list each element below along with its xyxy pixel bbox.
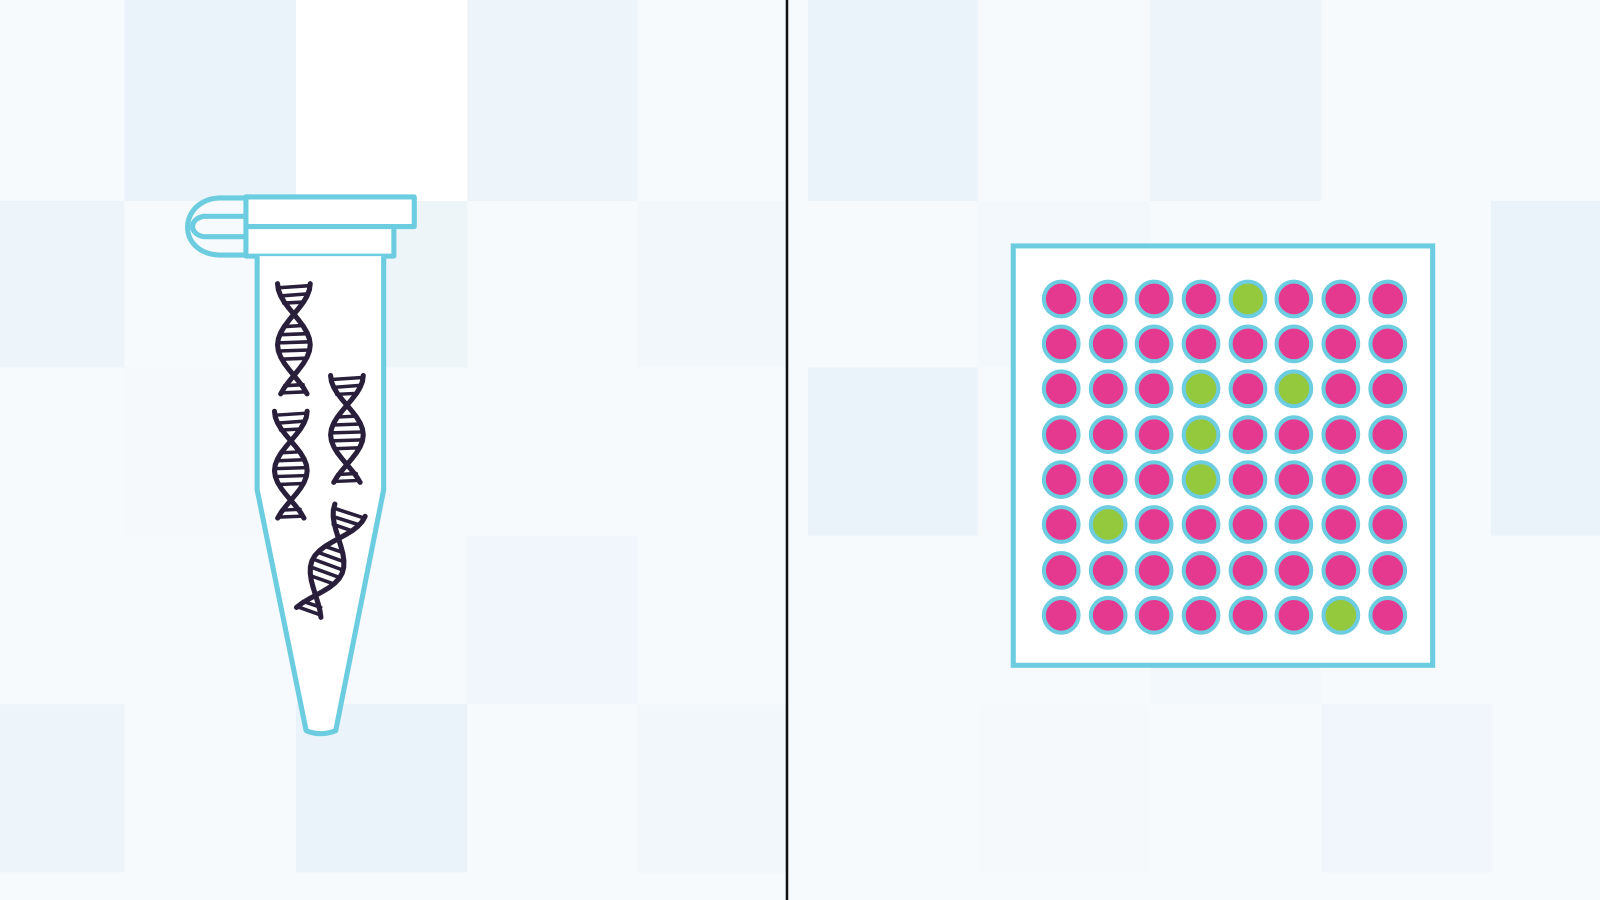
- tube cap: [188, 197, 414, 256]
- well plate: [1013, 246, 1433, 665]
- icon: tube with DNA: [188, 197, 414, 734]
- divider line: [786, 0, 788, 900]
- tube body: [257, 256, 384, 734]
- DNA helices: [274, 284, 365, 618]
